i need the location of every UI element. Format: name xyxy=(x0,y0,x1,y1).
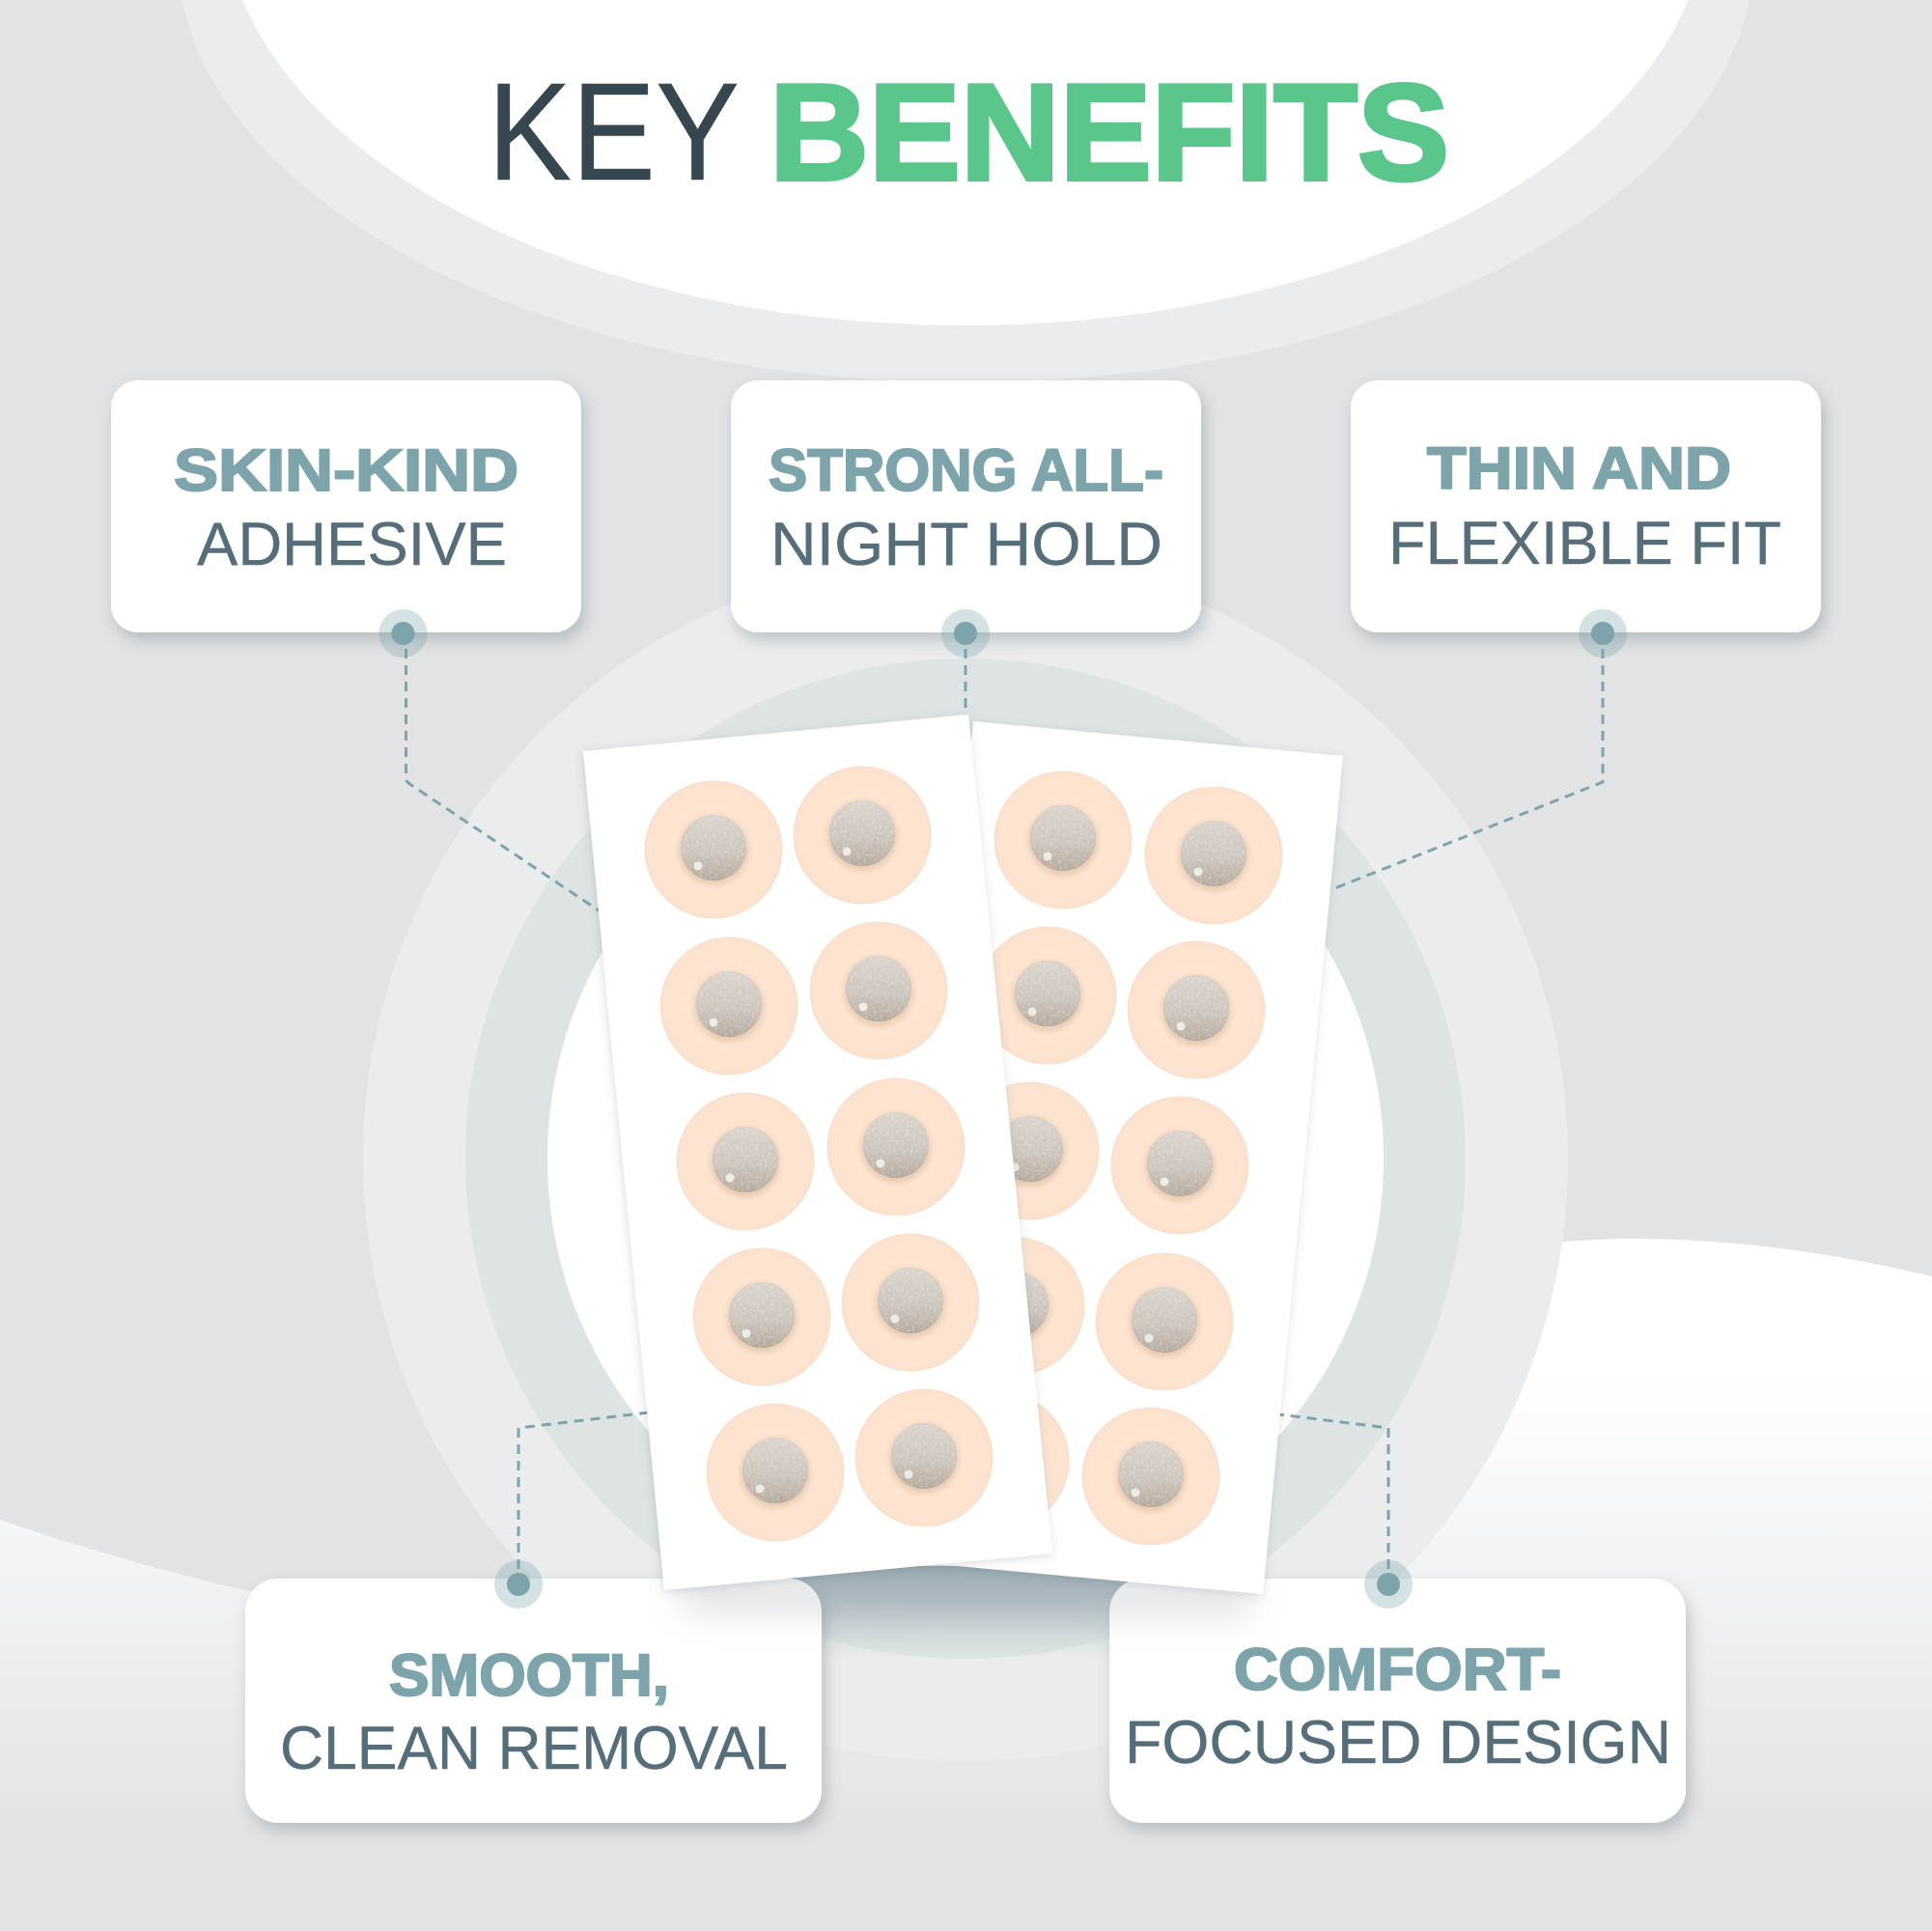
title: BENEFITS xyxy=(770,56,1449,210)
panel: thin and flexible fit: FLEXIBLE FIT xyxy=(1388,510,1781,577)
connector: skin-kind adhesive xyxy=(406,649,599,910)
panel: skin-kind adhesive xyxy=(111,380,581,632)
title xyxy=(488,54,1449,210)
patch sheet: left xyxy=(583,714,1052,1590)
soft shadow cast over cards xyxy=(676,1574,1255,1617)
panel: smooth clean removal: CLEAN REMOVAL xyxy=(280,1715,788,1782)
marker: strong all-night hold xyxy=(941,609,990,658)
panel: skin-kind adhesive: SKIN-KIND xyxy=(174,437,518,503)
bottom white wave xyxy=(0,1239,1932,1931)
panel: comfort-focused design xyxy=(1109,1579,1686,1823)
patch sheet: right xyxy=(893,721,1343,1594)
marker: skin-kind adhesive xyxy=(378,609,427,658)
panel: strong all-night hold xyxy=(731,380,1201,632)
panel: smooth clean removal: SMOOTH, xyxy=(389,1642,669,1708)
marker: comfort-focused design xyxy=(1364,1560,1413,1609)
panel: thin and flexible fit: THIN AND xyxy=(1427,435,1731,501)
panel: skin-kind adhesive: ADHESIVE xyxy=(197,511,507,578)
panel: strong all-night hold: NIGHT HOLD xyxy=(770,511,1162,578)
panel: thin and flexible fit xyxy=(1351,380,1821,632)
concentric circles backdrop xyxy=(363,556,1568,1761)
marker: thin and flexible fit xyxy=(1579,609,1627,658)
top header ellipse: inner white xyxy=(223,0,1708,325)
panel: comfort-focused design: FOCUSED DESIGN xyxy=(1125,1709,1671,1777)
connector: thin and flexible fit xyxy=(1332,649,1603,889)
shadow beneath sheets xyxy=(676,1566,1255,1659)
title: KEY xyxy=(488,54,740,210)
connector: strong all-night hold xyxy=(964,649,967,719)
panel: strong all-night hold: STRONG ALL- xyxy=(769,437,1163,503)
panel: smooth clean removal xyxy=(245,1579,822,1823)
marker: smooth clean removal xyxy=(494,1560,543,1609)
connector: smooth clean removal xyxy=(518,1413,649,1569)
top header ellipse: outer ring xyxy=(177,0,1754,382)
panel: comfort-focused design: COMFORT- xyxy=(1234,1637,1561,1702)
connector: comfort-focused design xyxy=(1279,1414,1388,1569)
